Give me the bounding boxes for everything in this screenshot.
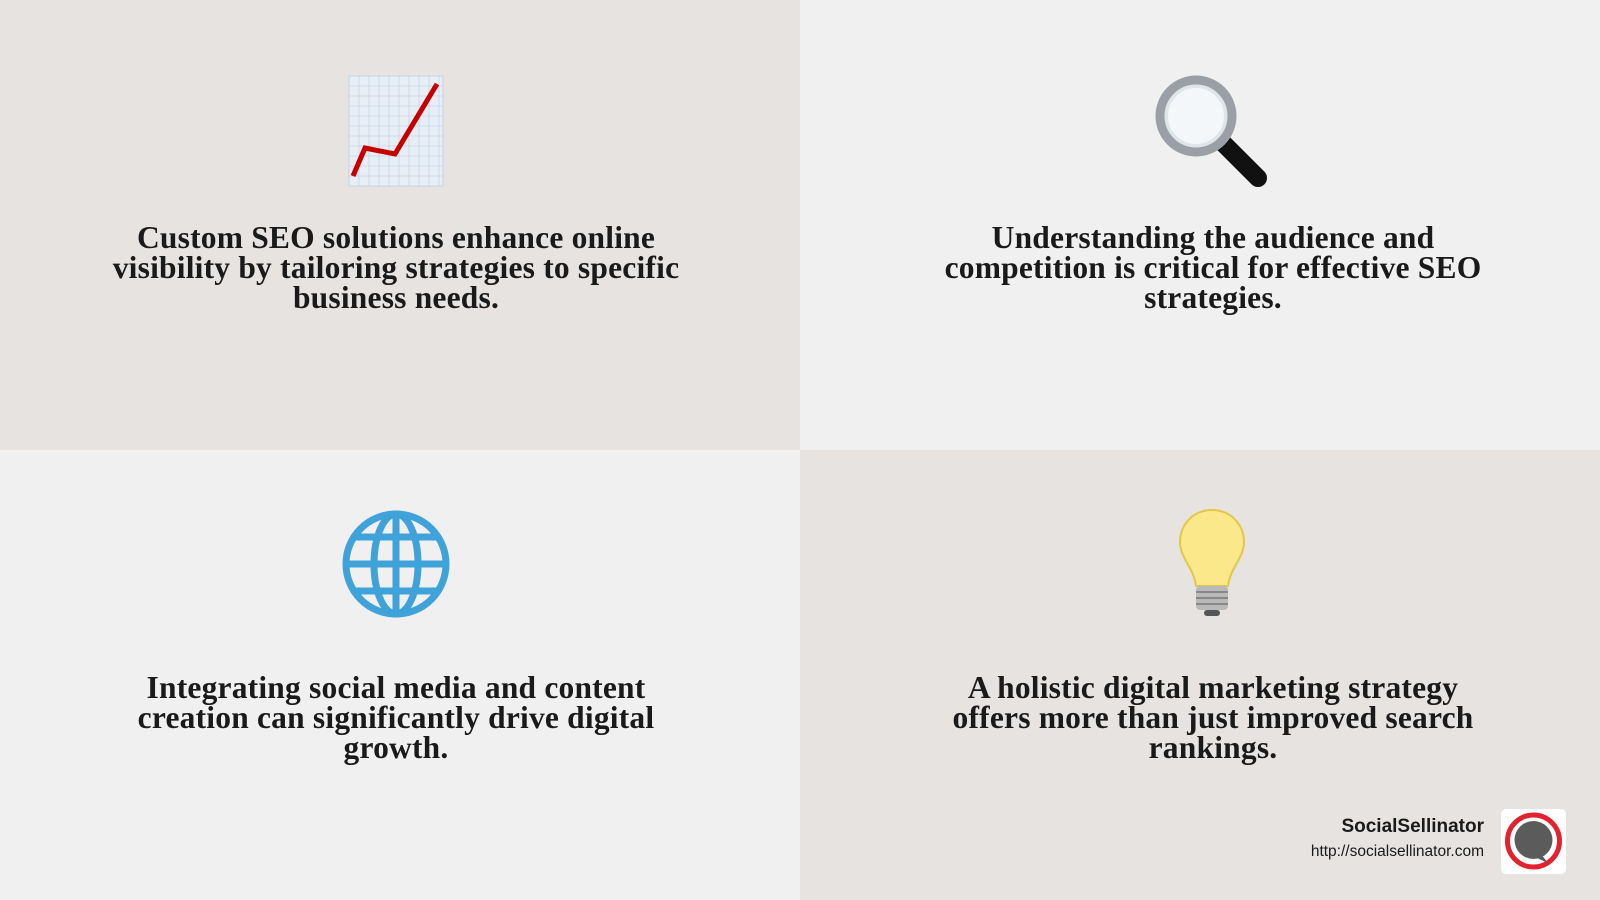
- text: social media: creation can significantly drive digital: [138, 700, 654, 735]
- text: custom SEO: business needs.: [293, 280, 499, 315]
- icon: lightbulb: [1179, 509, 1245, 616]
- text: audience: competition is critical for effective SEO: [945, 250, 1481, 285]
- text: audience: strategies.: [1144, 280, 1282, 315]
- text: social media: growth.: [344, 730, 448, 765]
- text: custom SEO: Custom SEO solutions enhance online: [137, 220, 655, 255]
- text: holistic: A holistic digital marketing strategy: [968, 670, 1458, 705]
- text: social media: [138, 670, 654, 765]
- text: social media: Integrating social media and content: [147, 670, 645, 705]
- text: custom SEO: [112, 220, 679, 315]
- panel: audience: [800, 0, 1600, 450]
- text: holistic: [953, 670, 1473, 765]
- text: holistic: rankings.: [1149, 730, 1277, 765]
- brand block: [1311, 816, 1484, 860]
- logo: [1501, 809, 1566, 874]
- panel: holistic: [800, 450, 1600, 900]
- text: audience: Understanding the audience and: [992, 220, 1434, 255]
- icon: chart: [348, 76, 444, 186]
- panel: social media: [0, 450, 800, 900]
- icon: magnifier: [1156, 76, 1267, 187]
- brand block: SocialSellinator: [1341, 816, 1484, 837]
- brand block: http://socialsellinator.com: [1311, 843, 1484, 860]
- text: custom SEO: visibility by tailoring strategies to specific: [113, 250, 679, 285]
- icon: globe: [342, 510, 450, 618]
- text: audience: [945, 220, 1481, 315]
- panel: custom SEO: [0, 0, 800, 450]
- text: holistic: offers more than just improved search: [953, 700, 1473, 735]
